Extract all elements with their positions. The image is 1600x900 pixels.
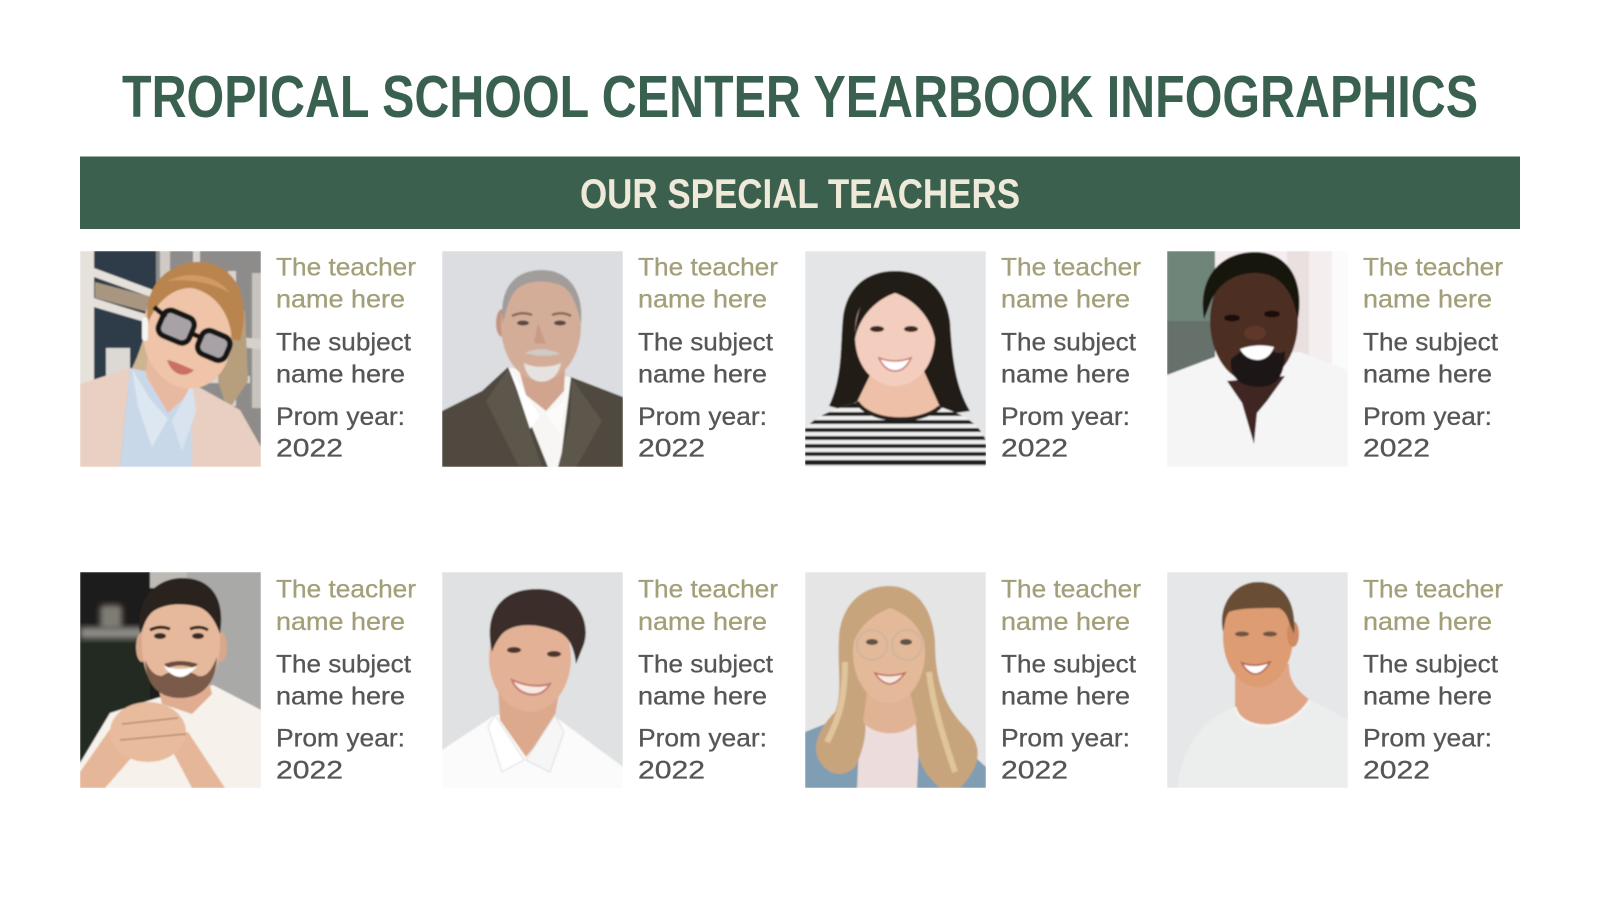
teacher name — [638, 575, 778, 636]
teacher name — [276, 254, 416, 314]
subject name: The subject — [638, 329, 773, 357]
subject name — [1001, 650, 1136, 710]
subject name: The subject — [1363, 329, 1498, 357]
banner: our special teachers — [80, 156, 1520, 229]
teacher name: name here — [638, 608, 767, 636]
photo: teacher 5, young man with clasped hands — [80, 572, 261, 788]
text: teacher 6 details — [638, 575, 778, 784]
teacher name: The teacher — [1363, 575, 1503, 603]
subject name: name here — [276, 361, 405, 389]
subject name — [638, 329, 773, 389]
prom year — [1363, 403, 1492, 463]
subject name: The subject — [1363, 650, 1498, 678]
teacher name — [1001, 254, 1141, 314]
photo: teacher 1, woman with glasses — [80, 251, 261, 467]
subject name: name here — [638, 682, 767, 710]
text: teacher 7 details — [1001, 575, 1141, 784]
prom year: Prom year: — [1001, 403, 1130, 431]
teacher name: The teacher — [638, 575, 778, 603]
teacher name — [1363, 575, 1503, 636]
prom year — [1363, 725, 1492, 784]
prom year — [276, 725, 405, 784]
teacher name — [1001, 575, 1141, 636]
subject name: The subject — [1001, 650, 1136, 678]
subject name — [276, 329, 411, 389]
prom year: Prom year: — [638, 403, 767, 431]
subject name: name here — [1363, 361, 1492, 389]
prom year: 2022 — [638, 756, 705, 784]
teacher name: name here — [638, 286, 767, 314]
subject name — [1363, 329, 1498, 389]
photo: teacher 4, man in white shirt — [1167, 251, 1347, 466]
prom year: Prom year: — [1001, 725, 1130, 753]
teacher name: name here — [1363, 608, 1492, 636]
teacher name — [276, 575, 416, 636]
text: teacher 1 details — [276, 254, 416, 463]
subject name — [1001, 329, 1136, 389]
teacher name: name here — [1001, 608, 1130, 636]
subject name: The subject — [276, 329, 411, 357]
teacher name — [1363, 254, 1503, 314]
prom year — [638, 403, 767, 463]
teacher name: name here — [1001, 286, 1130, 314]
prom year: 2022 — [276, 435, 343, 463]
prom year: Prom year: — [276, 403, 405, 431]
banner heading: OUR SPECIAL TEACHERS — [580, 170, 1020, 217]
prom year: 2022 — [1001, 435, 1068, 463]
teacher name: The teacher — [638, 254, 778, 282]
subject name — [638, 650, 773, 710]
photo: teacher 2, older man in tweed jacket — [442, 251, 623, 467]
text: teacher 4 details — [1363, 254, 1503, 463]
teacher name: name here — [276, 608, 405, 636]
photo: teacher 8, young man in white t-shirt — [1167, 572, 1348, 788]
text: teacher 3 details — [1001, 254, 1141, 463]
text: teacher 8 details — [1363, 575, 1503, 784]
prom year — [638, 725, 767, 784]
subject name: name here — [638, 361, 767, 389]
teacher name: The teacher — [276, 575, 416, 603]
teacher name: name here — [276, 286, 405, 314]
teacher name: name here — [1363, 286, 1492, 314]
photo: teacher 7, blonde woman with glasses — [805, 572, 986, 788]
prom year: 2022 — [638, 435, 705, 463]
teacher name: The teacher — [1363, 254, 1503, 282]
subject name: name here — [276, 682, 405, 710]
subject name: The subject — [638, 650, 773, 678]
prom year — [276, 403, 405, 463]
subject name: The subject — [276, 650, 411, 678]
prom year: 2022 — [276, 756, 343, 784]
text: teacher 2 details — [638, 254, 778, 463]
subject name — [1363, 650, 1498, 710]
prom year: Prom year: — [276, 725, 405, 753]
prom year: Prom year: — [638, 725, 767, 753]
teacher name: The teacher — [1001, 254, 1141, 282]
prom year: Prom year: — [1363, 403, 1492, 431]
prom year — [1001, 403, 1130, 463]
subject name: name here — [1001, 682, 1130, 710]
prom year: 2022 — [1363, 435, 1430, 463]
teacher name: The teacher — [276, 254, 416, 282]
subject name: The subject — [1001, 329, 1136, 357]
subject name: name here — [1363, 682, 1492, 710]
text: teacher 5 details — [276, 575, 416, 784]
teacher name: The teacher — [1001, 575, 1141, 603]
subject name — [276, 650, 411, 710]
prom year — [1001, 725, 1130, 784]
prom year: 2022 — [1001, 756, 1068, 784]
prom year: 2022 — [1363, 756, 1430, 784]
teacher name — [638, 254, 778, 314]
subject name: name here — [1001, 361, 1130, 389]
prom year: Prom year: — [1363, 725, 1492, 753]
photo: teacher 6, woman with short dark hair — [442, 572, 623, 773]
photo: teacher 3, woman in striped top — [805, 251, 986, 467]
